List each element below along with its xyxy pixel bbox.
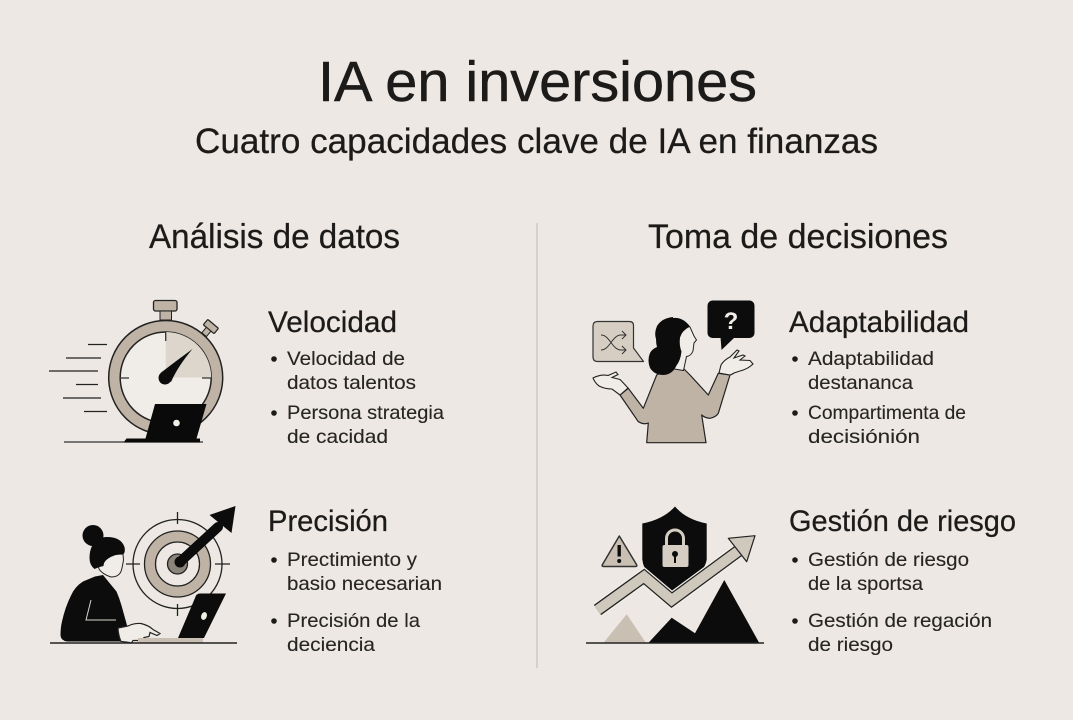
panel: Precisión	[50, 505, 442, 656]
bullet list: Compartimenta de	[808, 402, 966, 424]
heading: Gestión de riesgo: Gestión de riesgo	[789, 505, 1016, 538]
icon: woman at laptop with target	[50, 506, 237, 643]
bullet list: Gestión de regación	[808, 610, 992, 632]
panel: Gestión de riesgo	[586, 505, 1016, 656]
bullet list: de riesgo	[808, 634, 893, 656]
bullet list	[792, 348, 966, 448]
heading: Adaptabilidad: Adaptabilidad	[789, 306, 969, 339]
bullet list: basio necesarian	[287, 573, 442, 595]
column heading: Toma de decisiones: Toma de decisiones	[648, 218, 948, 256]
bullet list: Prectimiento y	[287, 549, 417, 571]
bullet list: destananca	[808, 372, 913, 394]
column heading: Análisis de datos: Análisis de datos	[149, 218, 400, 256]
icon: woman weighing options: ?	[724, 308, 738, 335]
bullet list: datos talentos	[287, 372, 416, 394]
subtitle: Cuatro capacidades clave de IA en finanzas	[195, 122, 878, 161]
bullet list: deciencia	[287, 634, 375, 656]
panel: Adaptabilidad	[593, 300, 969, 448]
bullet list: de cacidad	[287, 426, 388, 448]
heading: Velocidad: Velocidad	[268, 306, 397, 339]
bullet list: Gestión de riesgo	[808, 549, 969, 571]
bullet list: decisiónión	[808, 426, 920, 448]
panel: Velocidad	[49, 300, 444, 448]
bullet list: de la sportsa	[808, 573, 923, 595]
heading: Precisión: Precisión	[268, 505, 388, 538]
bullet list	[271, 549, 442, 656]
icon: shield, warning, rising arrow and peaks	[586, 506, 764, 643]
body	[620, 367, 730, 443]
bullet list	[792, 549, 992, 656]
icon: stopwatch with laptop	[49, 300, 223, 442]
bullet list: Precisión de la	[287, 610, 420, 632]
bullet list	[271, 348, 444, 448]
bullet list: Persona strategia	[287, 402, 444, 424]
title: IA en inversiones	[318, 50, 757, 114]
bullet list: Velocidad de	[287, 348, 405, 370]
bullet list: Adaptabilidad	[808, 348, 934, 370]
icon: woman weighing options	[593, 300, 754, 443]
